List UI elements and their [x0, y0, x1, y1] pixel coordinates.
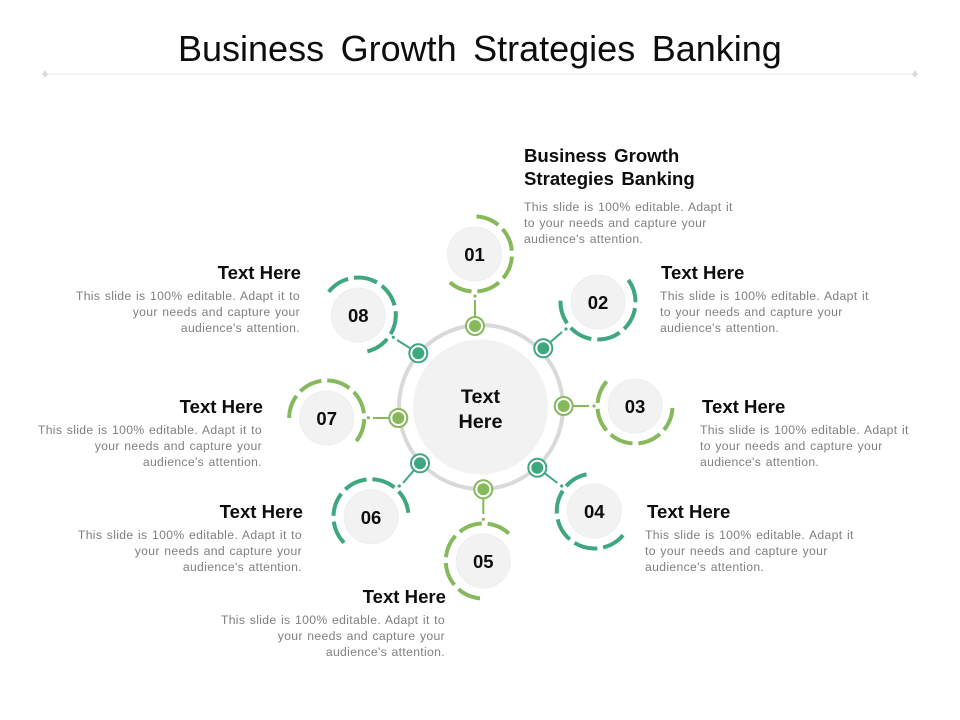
text block 07 [38, 396, 263, 469]
text block 02: audience's attention. [660, 321, 779, 335]
text block 05: This slide is 100% editable. Adapt it to [221, 613, 445, 627]
text block 04: Text Here [647, 501, 730, 522]
text block 06: Text Here [220, 501, 303, 522]
node 05 [443, 480, 524, 602]
central hub: Text [461, 386, 501, 408]
text block 07: audience's attention. [143, 455, 262, 469]
text block 05: audience's attention. [326, 645, 445, 659]
text block 04 [645, 501, 854, 574]
title divider [42, 70, 918, 78]
text block 04: to your needs and capture your [645, 544, 828, 558]
text block 03: This slide is 100% editable. Adapt it [700, 423, 909, 437]
node 06 [318, 454, 429, 570]
node 07 [289, 380, 407, 456]
node 08: 08 [348, 305, 369, 326]
text block 01: Business Growth [524, 145, 679, 166]
central hub: Here [458, 411, 502, 433]
text block 01: This slide is 100% editable. Adapt it [524, 200, 733, 214]
node 02: 02 [588, 292, 608, 313]
node 04: 04 [584, 501, 605, 522]
node 03 [555, 367, 674, 445]
text block 01: Strategies Banking [524, 168, 695, 189]
node 01 [435, 215, 514, 335]
text block 06: your needs and capture your [135, 544, 302, 558]
node 06: 06 [361, 507, 381, 528]
node 07: 07 [316, 408, 337, 429]
node 08 [306, 262, 427, 368]
node 05: 05 [473, 551, 494, 572]
node 02 [534, 250, 650, 357]
text block 07: your needs and capture your [95, 439, 262, 453]
text block 03: to your needs and capture your [700, 439, 883, 453]
text block 03: Text Here [702, 396, 785, 417]
text block 05: Text Here [363, 586, 446, 607]
title: Business Growth Strategies Banking [178, 28, 782, 69]
text block 04: This slide is 100% editable. Adapt it [645, 528, 854, 542]
text block 08: This slide is 100% editable. Adapt it to [76, 289, 300, 303]
text block 05: your needs and capture your [278, 629, 445, 643]
text block 06 [78, 501, 303, 574]
node 04 [528, 458, 647, 564]
text block 08: audience's attention. [181, 321, 300, 335]
text block 06: This slide is 100% editable. Adapt it to [78, 528, 302, 542]
central ring [399, 325, 563, 489]
text block 06: audience's attention. [183, 560, 302, 574]
text block 07: Text Here [180, 396, 263, 417]
text block 08: your needs and capture your [133, 305, 300, 319]
text block 01: audience's attention. [524, 232, 643, 246]
text block 05 [221, 586, 446, 659]
text block 04: audience's attention. [645, 560, 764, 574]
text block 02 [660, 262, 869, 335]
text block 08 [76, 262, 301, 335]
text block 01 [524, 145, 733, 246]
text block 02: This slide is 100% editable. Adapt it [660, 289, 869, 303]
text block 01: to your needs and capture your [524, 216, 707, 230]
text block 02: Text Here [661, 262, 744, 283]
text block 07: This slide is 100% editable. Adapt it to [38, 423, 262, 437]
central hub [413, 340, 548, 474]
text block 03 [700, 396, 909, 469]
text block 02: to your needs and capture your [660, 305, 843, 319]
node 01: 01 [464, 244, 485, 265]
node 03: 03 [625, 396, 645, 417]
text block 08: Text Here [218, 262, 301, 283]
text block 03: audience's attention. [700, 455, 819, 469]
